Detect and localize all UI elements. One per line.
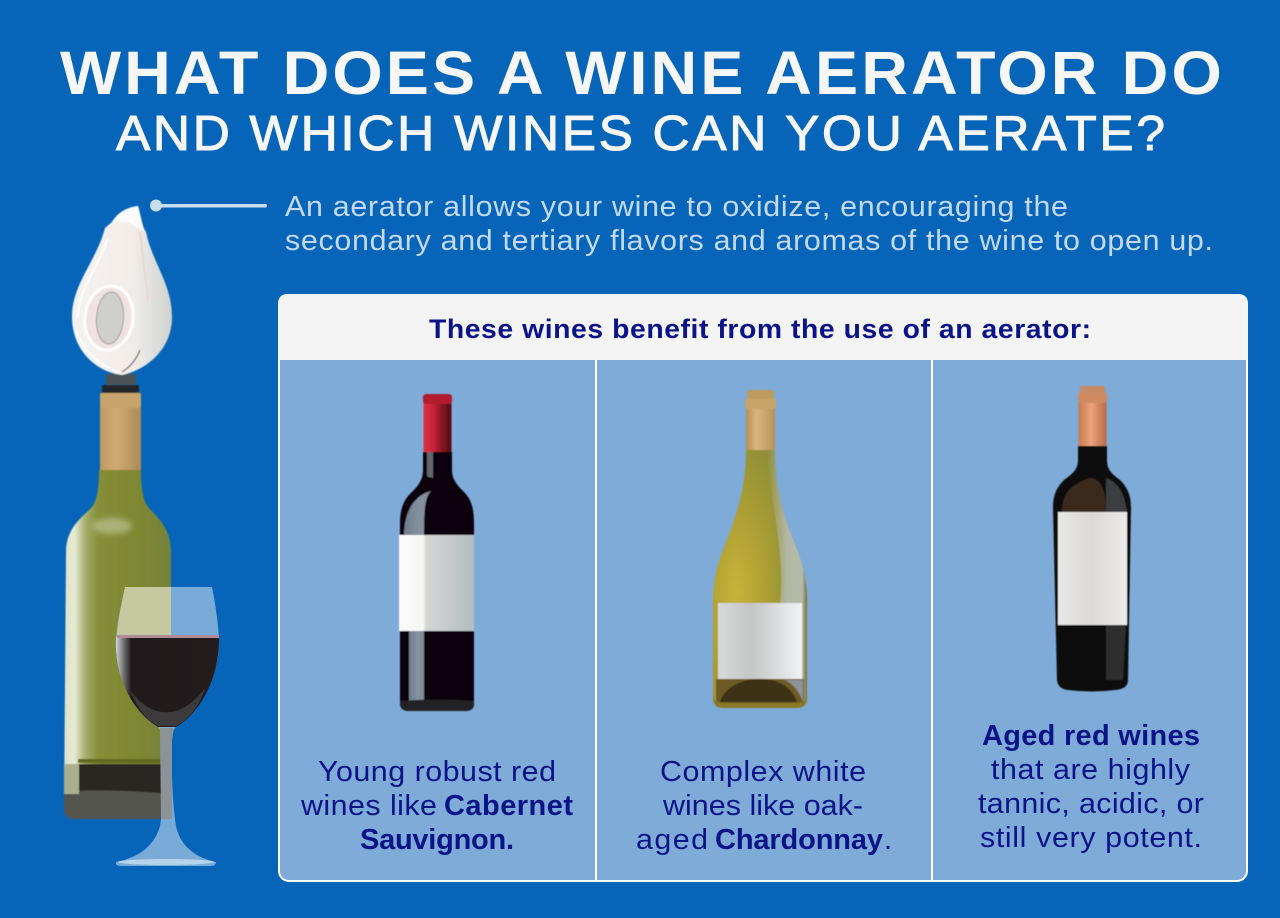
column: young red — [300, 394, 573, 856]
icon: wine glass — [116, 587, 219, 866]
text: aged red wines: that are highly — [991, 754, 1190, 786]
text: complex white wines: wines like oak- — [662, 790, 863, 822]
icon: aerator — [72, 206, 172, 385]
text: young red wines: Cabernet — [444, 790, 573, 822]
panel body — [279, 295, 1247, 881]
text: aged red wines: still very potent. — [980, 822, 1202, 854]
panel: wines that benefit — [278, 294, 1248, 881]
text: young red wines: wines like — [300, 790, 437, 822]
text: aged red wines: tannic, acidic, or — [978, 788, 1204, 820]
text: complex white wines: Chardonnay — [715, 824, 883, 856]
text: aged red wines: Aged red wines — [982, 720, 1200, 752]
title — [60, 40, 1222, 161]
intro text — [285, 191, 1213, 257]
panel header — [278, 294, 1248, 360]
intro text: secondary and tertiary flavors and aromas of the wine to open up. — [285, 225, 1213, 257]
column: aged red — [978, 386, 1204, 854]
text: complex white wines — [636, 756, 892, 856]
text: aged red wines — [978, 720, 1204, 854]
illustration: bottle with aerator and glass — [64, 206, 219, 866]
text: young red wines — [300, 756, 573, 856]
icon: aged red wine bottle — [1053, 386, 1131, 692]
icon: red wine bottle — [399, 394, 474, 711]
icon: green wine bottle — [64, 385, 171, 819]
icon: white wine bottle — [713, 390, 807, 708]
panel heading: These wines benefit from the use of an aerator: — [429, 314, 1091, 344]
text: complex white wines: . — [884, 824, 892, 856]
title: WHAT DOES A WINE AERATOR DO — [60, 40, 1222, 108]
callout leader line — [150, 200, 267, 212]
text: complex white wines: Complex white — [660, 756, 866, 788]
text: young red wines: Sauvignon. — [360, 824, 514, 856]
intro text: An aerator allows your wine to oxidize, encouraging the — [285, 191, 1068, 223]
text: young red wines: Young robust red — [318, 756, 556, 788]
title: AND WHICH WINES CAN YOU AERATE? — [116, 106, 1165, 161]
text: complex white wines: aged — [636, 824, 708, 856]
column: white wine — [636, 390, 892, 856]
